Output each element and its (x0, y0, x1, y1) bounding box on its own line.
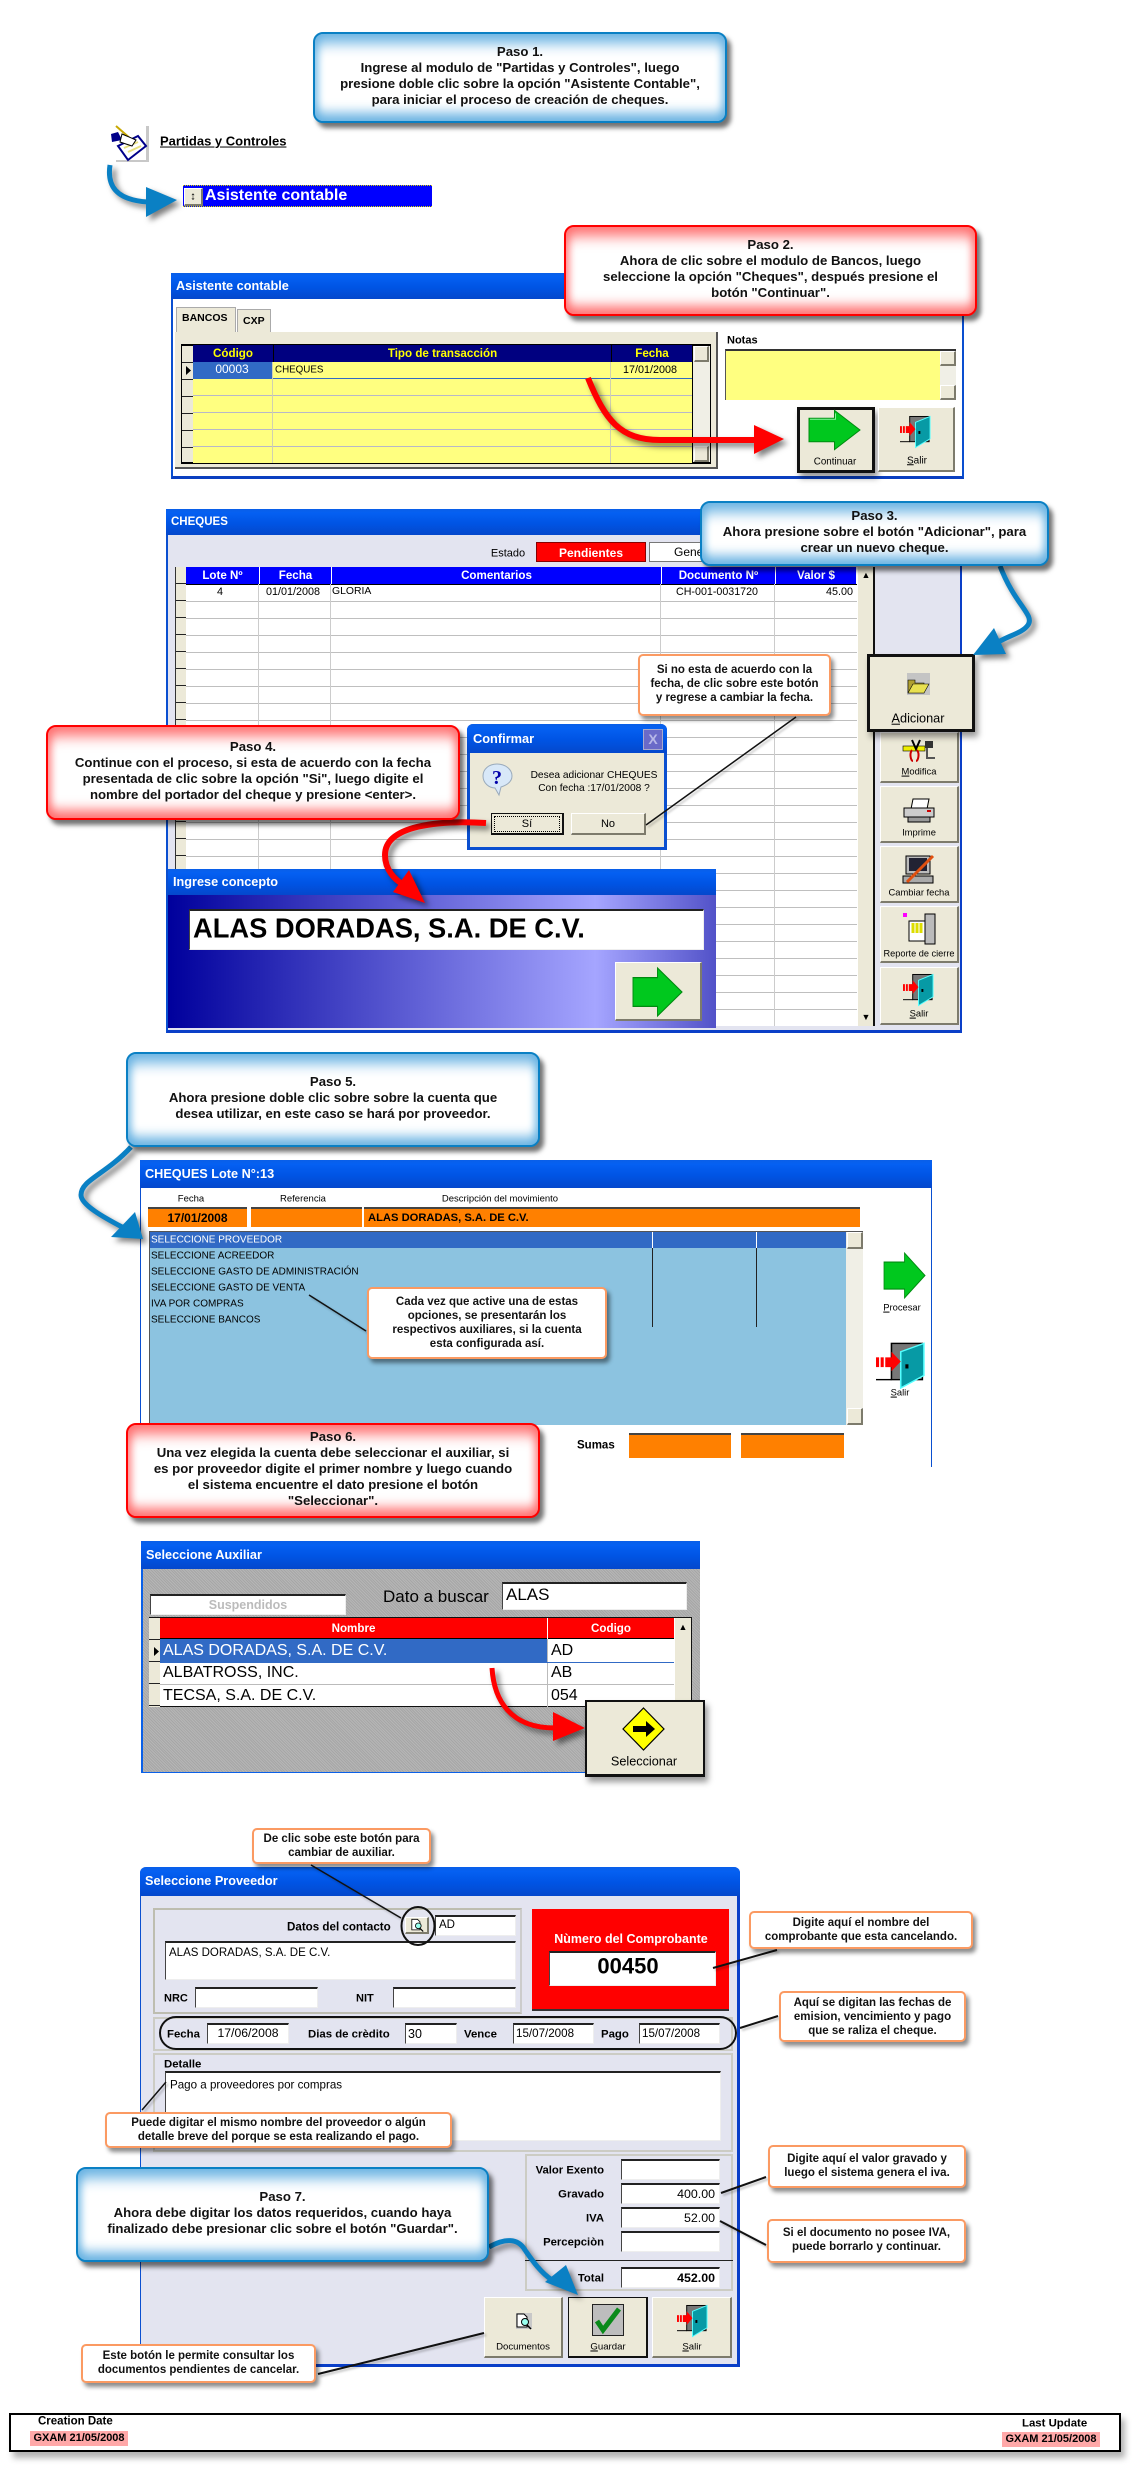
icon: exit door (900, 416, 931, 448)
icon: procesar arrow (884, 1252, 926, 1299)
total field 1 (629, 1433, 731, 1458)
header: fecha: Fecha (635, 347, 669, 360)
selected cell (193, 362, 272, 378)
group: valores: Valor Exento (536, 2165, 604, 2177)
group: dates: Fecha (167, 2028, 200, 2040)
callout: comprobante name: comprobante que esta cancelando. (765, 1931, 957, 1943)
header: codigo (193, 345, 273, 362)
icon: open folder (907, 673, 930, 695)
title bar (140, 1160, 932, 1188)
group: valores: 52.00 (684, 2211, 715, 2225)
callout: detalle: Puede digitar el mismo nombre del proveedor o algún (131, 2117, 426, 2129)
header: lote (186, 567, 259, 584)
table: auxiliares: ALBATROSS, INC. (163, 1664, 299, 1681)
title bar: Confirmar (473, 731, 534, 746)
button: no (571, 813, 646, 835)
heading: partidas y controles: Partidas y Controles (160, 134, 286, 149)
title bar: CHEQUES Lote N°:13 (145, 1167, 274, 1181)
icon: document magnifier (516, 2313, 532, 2330)
checkbox: suspendidos: Suspendidos (209, 1598, 287, 1612)
close button: X (648, 731, 658, 747)
step 5 callout: desea utilizar, en este caso se hará por proveedor. (175, 1106, 491, 1121)
option bar: asistente contable: ↕ (190, 191, 196, 203)
header: valor: Valor $ (797, 569, 835, 582)
group: valores: Gravado (558, 2189, 604, 2201)
header: documento (662, 567, 775, 584)
icon: printer (904, 798, 934, 822)
group: valores: Percepciòn (543, 2237, 604, 2249)
title bar (467, 724, 667, 753)
panel: transaction grid: 00003 (215, 362, 249, 376)
step 6 callout: Paso 6. (310, 1429, 356, 1444)
icon: exit door (876, 1342, 925, 1390)
button: continuar (797, 407, 875, 473)
callout: change auxiliary: De clic sobe este botón para (264, 1833, 419, 1845)
button: next (615, 962, 702, 1021)
callout: auxiliares: Cada vez que active una de estas (396, 1296, 578, 1308)
table: auxiliares: AD (551, 1642, 573, 1659)
table: auxiliares: ▲ (679, 1622, 687, 1632)
title bar: CHEQUES (171, 516, 228, 528)
field: fecha: 17/01/2008 (167, 1211, 228, 1225)
header: fecha (612, 345, 692, 362)
field: fecha (148, 1207, 247, 1227)
title bar: Asistente contable (176, 279, 289, 293)
group: dates (153, 2017, 733, 2051)
step 7 callout: Ahora debe digitar los datos requeridos, cuando haya (114, 2205, 451, 2220)
button: salir (880, 967, 959, 1025)
last update: Last Update (1022, 2417, 1087, 2429)
option bar: asistente contable: Asistente contable (205, 187, 347, 204)
button: seleccionar (585, 1700, 705, 1777)
button: guardar: Guardar (590, 2341, 626, 2352)
leader line: documentos callout (318, 2332, 487, 2378)
field: referencia (251, 1207, 362, 1227)
callout: dates: que se raliza el cheque. (808, 2025, 937, 2037)
account list: SELECCIONE GASTO DE VENTA (151, 1282, 305, 1293)
step 4 callout: Paso 4. (230, 739, 276, 754)
grid rows (186, 584, 857, 1026)
step 2 callout: botón "Continuar". (711, 285, 830, 300)
callout: change auxiliary (252, 1828, 431, 1864)
arrow: blue to asistente contable (106, 164, 182, 224)
scrollbar (675, 1618, 692, 1707)
title bar (168, 869, 716, 895)
notes box (725, 349, 956, 400)
step 4 callout: nombre del portador del cheque y presione <enter>. (90, 787, 416, 802)
list options: SELECCIONE PROVEEDOR (151, 1234, 282, 1245)
header: comentarios (332, 567, 661, 584)
button: documentos: Documentos (496, 2341, 550, 2352)
callout: dates: emision, vencimiento y pago (794, 2011, 951, 2023)
input: nit (393, 1987, 516, 2008)
step 6 callout: Una vez elegida la cuenta debe seleccionar el auxiliar, si (157, 1445, 509, 1460)
group: dates: 17/06/2008 (218, 2026, 278, 2040)
button: si: Sí (522, 818, 532, 830)
button: salir: Salir (907, 455, 927, 466)
input: company name (189, 909, 704, 950)
input: alas (502, 1582, 687, 1610)
tab: cxp (237, 309, 271, 333)
scrollbar (858, 567, 875, 1026)
total field 2 (741, 1433, 844, 1458)
step 5 callout: Paso 5. (310, 1074, 356, 1089)
window: seleccione proveedor (140, 1867, 740, 2367)
header: nombre: Nombre (332, 1622, 375, 1635)
group: valores: 400.00 (677, 2187, 715, 2201)
label: sumas: Sumas (577, 1439, 615, 1451)
grid: cheques list: 01/01/2008 (266, 586, 320, 598)
step 4 callout: presentada de clic sobre la opción "Si", luego digite el (83, 771, 423, 786)
button: salir (652, 2297, 732, 2358)
input: ad: AD (439, 1919, 455, 1931)
group: dates: Dias de crèdito (308, 2028, 390, 2040)
button: guardar (568, 2297, 648, 2358)
group: detalle: Pago a proveedores por compras (170, 2078, 342, 2091)
step 3 callout: crear un nuevo cheque. (800, 540, 949, 555)
button: imprime: Imprime (902, 827, 936, 838)
window: cheques lote 13 (140, 1160, 932, 1467)
field: descripcion (364, 1207, 860, 1227)
callout: documentos: Este botón le permite consultar los (103, 2350, 294, 2362)
group: detalle (153, 2053, 733, 2152)
leader line: no button callout (646, 716, 798, 828)
group: dates: 15/07/2008 (516, 2027, 574, 2040)
callout: change auxiliary: cambiar de auxiliar. (288, 1847, 395, 1859)
callout: documentos (81, 2344, 316, 2383)
button: reporte de cierre: Reporte de cierre (884, 949, 954, 959)
callout: comprobante name: Digite aquí el nombre del (793, 1917, 929, 1929)
table: auxiliares: 054 (551, 1687, 578, 1704)
window: ingrese concepto (168, 869, 716, 1028)
icon: question bubble (482, 764, 512, 796)
button: imprime (880, 786, 959, 843)
icon: exit door (903, 974, 934, 1006)
group: contact data (153, 1908, 522, 2014)
title bar (140, 1867, 740, 1896)
callout: gravado: luego el sistema genera el iva. (784, 2167, 950, 2179)
label: estado: Estado (491, 548, 525, 560)
callout: auxiliares (367, 1287, 607, 1359)
step 4 callout: Continue con el proceso, si esta de acuerdo con la fecha (75, 755, 431, 770)
account list: IVA POR COMPRAS (151, 1298, 244, 1309)
leader line: dates callout (740, 2015, 779, 2032)
step 1 callout (313, 32, 727, 123)
button: reporte de cierre (880, 906, 959, 963)
icon: green arrow (632, 966, 683, 1018)
icon: green check (592, 2304, 624, 2336)
input: name: ALAS DORADAS, S.A. DE C.V. (169, 1947, 330, 1959)
window: cheques lote 13: Referencia (280, 1194, 326, 1205)
update stamp: GXAM 21/05/2008 (1005, 2433, 1097, 2445)
callout: comprobante name (749, 1911, 973, 1949)
callout: dates (779, 1991, 966, 2042)
header: valor (776, 567, 856, 584)
header: tipo (274, 345, 611, 362)
button: pendientes: Pendientes (559, 546, 623, 560)
input: nrc (195, 1987, 318, 2008)
header: documento: Documento Nº (679, 569, 758, 582)
group: dates: 15/07/2008 (642, 2027, 700, 2040)
group: detalle: Detalle (164, 2058, 201, 2070)
step 2 callout: seleccione la opción "Cheques", después presione el (603, 269, 938, 284)
callout: gravado (768, 2145, 966, 2188)
label: dato a buscar: Dato a buscar (383, 1587, 489, 1606)
callout: change date: fecha, de clic sobre este botón (650, 678, 819, 690)
arrow: red to seleccionar (490, 1668, 585, 1747)
button: cambiar fecha (880, 846, 959, 903)
arrow: blue to seleccione proveedor (78, 1145, 149, 1247)
label: datos del contacto: Datos del contacto (287, 1920, 391, 1933)
header: fecha (260, 567, 331, 584)
lookup button (405, 1917, 429, 1934)
callout: detalle (105, 2112, 452, 2148)
step 6 callout: es por proveedor digite el primer nombre y luego cuando (154, 1461, 512, 1476)
group: dates: Vence (464, 2028, 497, 2040)
callout: change date: y regrese a cambiar la fecha. (656, 692, 813, 704)
grid: cheques list: ▲ (862, 570, 870, 580)
group: valores: Total (578, 2273, 604, 2285)
table: auxiliares: AB (551, 1664, 572, 1681)
account list: SELECCIONE BANCOS (151, 1314, 260, 1325)
icon: tools (902, 740, 935, 762)
tab: bancos: BANCOS (182, 312, 228, 324)
label: procesar: Procesar (883, 1302, 921, 1313)
title bar: Seleccione Proveedor (145, 1874, 278, 1888)
row: cheque 4: 4 (217, 586, 223, 598)
button: adicionar (867, 654, 975, 732)
panel: numero del comprobante: 00450 (597, 1953, 659, 1978)
callout: change date: Si no esta de acuerdo con la (657, 664, 812, 676)
window: asistente contable (171, 273, 964, 479)
input: name (165, 1941, 516, 1980)
group: valores (525, 2154, 733, 2291)
button: seleccionar: Seleccionar (611, 1755, 677, 1769)
header: codigo: Codigo (591, 1622, 631, 1635)
tab: cxp: CXP (243, 315, 265, 327)
message: Desea adicionar CHEQUES (531, 770, 657, 781)
group: dates: Pago (601, 2028, 629, 2040)
button: salir (878, 407, 955, 472)
option bar: asistente contable (183, 185, 432, 207)
title bar: Ingrese concepto (173, 875, 278, 889)
grid: cheques list: 45.00 (826, 586, 853, 598)
header: codigo: Código (213, 347, 253, 360)
creation stamp: GXAM 21/05/2008 (33, 2432, 125, 2444)
button: generados (649, 542, 769, 562)
table: auxiliares: ALAS DORADAS, S.A. DE C.V. (163, 1642, 387, 1659)
icon: exit door (677, 2304, 708, 2338)
title bar (171, 273, 964, 299)
arrow: red from si to concepto (382, 819, 494, 909)
grid: cheques list (175, 567, 875, 1026)
message (531, 770, 657, 794)
title bar: Seleccione Auxiliar (146, 1548, 262, 1562)
close button (643, 729, 663, 750)
callout: auxiliares: opciones, se presentarán los (408, 1310, 566, 1322)
icon: question bubble: ? (492, 767, 502, 789)
callout: auxiliares: respectivos auxiliares, si la cuenta (392, 1324, 582, 1336)
step 7 callout: Paso 7. (259, 2189, 306, 2204)
header: tipo: Tipo de transacción (388, 347, 497, 360)
step 5 callout (126, 1052, 540, 1147)
footer (9, 2413, 1121, 2452)
button: salir: Salir (910, 1008, 928, 1019)
step 6 callout (126, 1423, 540, 1518)
panel: transaction grid: 17/01/2008 (623, 364, 677, 376)
leader line: iva callout (720, 2220, 767, 2248)
panel: transaction grid (175, 332, 718, 469)
step 1 callout: para iniciar el proceso de creación de cheques. (372, 92, 668, 107)
callout: iva: Si el documento no posee IVA, (783, 2227, 950, 2239)
callout: documentos: documentos pendientes de cancelar. (98, 2364, 299, 2376)
label: salir: Salir (891, 1387, 909, 1398)
field: descripcion: ALAS DORADAS, S.A. DE C.V. (368, 1212, 529, 1224)
callout: dates: Aquí se digitan las fechas de (794, 1997, 951, 2009)
step 6 callout: el sistema encuentre el dato presione el botón (188, 1477, 478, 1492)
panel: numero del comprobante (532, 1909, 729, 2011)
step 1 callout: Paso 1. (497, 44, 543, 59)
header: lote: Lote Nº (202, 569, 243, 582)
step 3 callout (700, 501, 1049, 566)
step 2 callout (564, 225, 977, 316)
leader line: comprobante callout (712, 1949, 780, 1972)
callout: auxiliares: esta configurada así. (430, 1338, 544, 1350)
button: modifica (880, 732, 959, 783)
selected row (160, 1639, 547, 1662)
grid: cheques list: CH-001-0031720 (676, 586, 758, 598)
button: no: No (601, 818, 615, 830)
highlight: dates rounded outline (159, 2016, 737, 2050)
callout: detalle: detalle breve del porque se esta realizando el pago. (138, 2131, 419, 2143)
button: si (491, 813, 564, 835)
leader line: options callout (308, 1294, 367, 1334)
button: modifica: Modifica (902, 766, 936, 777)
step 5 callout: Ahora presione doble clic sobre sobre la cuenta que (169, 1090, 497, 1105)
window: seleccione auxiliar (141, 1541, 700, 1773)
label: notas: Notas (727, 335, 758, 347)
step 4 callout (46, 725, 460, 820)
table: auxiliares: TECSA, S.A. DE C.V. (163, 1687, 316, 1704)
step 7 callout (76, 2167, 489, 2262)
step 2 callout: Paso 2. (747, 237, 794, 252)
title bar (166, 509, 962, 535)
step 2 callout: Ahora de clic sobre el modulo de Bancos, luego (620, 253, 921, 268)
rows (193, 362, 692, 463)
button: documentos (484, 2297, 563, 2358)
button: generados: Gene (674, 545, 703, 559)
step 3 callout: Paso 3. (851, 508, 898, 523)
step 6 callout: "Seleccionar". (288, 1493, 378, 1508)
input: number (549, 1951, 716, 1986)
icon: yellow diamond arrow (622, 1707, 665, 1751)
window: ingrese concepto: ALAS DORADAS, S.A. DE C.V. (193, 912, 585, 943)
panel: numero del comprobante: Nùmero del Comprobante (554, 1932, 708, 1946)
leader line: lookup callout (310, 1864, 404, 1921)
tab: bancos (176, 307, 236, 333)
icon: report (903, 913, 936, 944)
window: cheques (166, 509, 962, 1033)
account list (149, 1231, 863, 1425)
dialog: confirmar (467, 724, 667, 850)
grid: cheques list: ▼ (862, 1012, 870, 1022)
arrow: blue to guardar (489, 2238, 584, 2302)
window: cheques lote 13: Descripción del movimiento (442, 1194, 558, 1205)
message: Con fecha :17/01/2008 ? (538, 783, 650, 794)
leader line: detalle callout (142, 2082, 169, 2112)
creation date: Creation Date (38, 2415, 113, 2427)
title bar (141, 1541, 700, 1569)
group: dates: 30 (408, 2027, 422, 2041)
highlight: lookup button ellipse (400, 1906, 436, 1946)
button: adicionar: Adicionar (892, 712, 944, 726)
button: salir: Salir (682, 2341, 702, 2352)
checkbox: suspendidos (150, 1594, 346, 1615)
group: valores: 452.00 (677, 2271, 715, 2285)
field labels: Fecha (178, 1194, 204, 1205)
icon: green arrow (808, 410, 861, 451)
callout: iva: puede borrarlo y continuar. (792, 2241, 941, 2253)
step 3 callout: Ahora presione sobre el botón "Adicionar", para (723, 524, 1026, 539)
leader line: gravado callout (720, 2176, 768, 2196)
header: codigo (548, 1618, 674, 1639)
account list: SELECCIONE ACREEDOR (151, 1250, 274, 1261)
grid: cheques list: GLORIA (332, 586, 371, 597)
step 7 callout: finalizado debe presionar clic sobre el botón "Guardar". (107, 2221, 458, 2236)
header: nombre (160, 1618, 547, 1639)
step 1 callout: Ingrese al modulo de "Partidas y Controles", luego (361, 60, 679, 75)
input: ad (435, 1915, 516, 1936)
label: nrc: NRC (164, 1993, 188, 2005)
arrow: red to continuar (585, 376, 790, 460)
label: nit: NIT (356, 1993, 374, 2005)
input: alas: ALAS (506, 1585, 549, 1604)
button: pendientes (536, 542, 646, 562)
header: fecha: Fecha (279, 569, 312, 582)
arrow: blue to adicionar (973, 566, 1040, 663)
header: comentarios: Comentarios (461, 569, 532, 582)
account list: SELECCIONE GASTO DE ADMINISTRACIÓN (151, 1266, 359, 1277)
table: auxiliares (149, 1617, 692, 1707)
button: continuar: Continuar (814, 456, 856, 467)
callout: iva (767, 2219, 966, 2263)
panel: transaction grid: CHEQUES (275, 364, 323, 375)
callout: gravado: Digite aquí el valor gravado y (787, 2153, 947, 2165)
button: cambiar fecha: Cambiar fecha (889, 887, 949, 898)
step 1 callout: presione doble clic sobre la opción "Asistente Contable", (340, 76, 700, 91)
callout: change date (638, 654, 831, 716)
group: valores: IVA (586, 2213, 604, 2225)
icon: computer with screwdriver (902, 855, 934, 884)
icon: partidas y controles notepad (111, 125, 149, 162)
